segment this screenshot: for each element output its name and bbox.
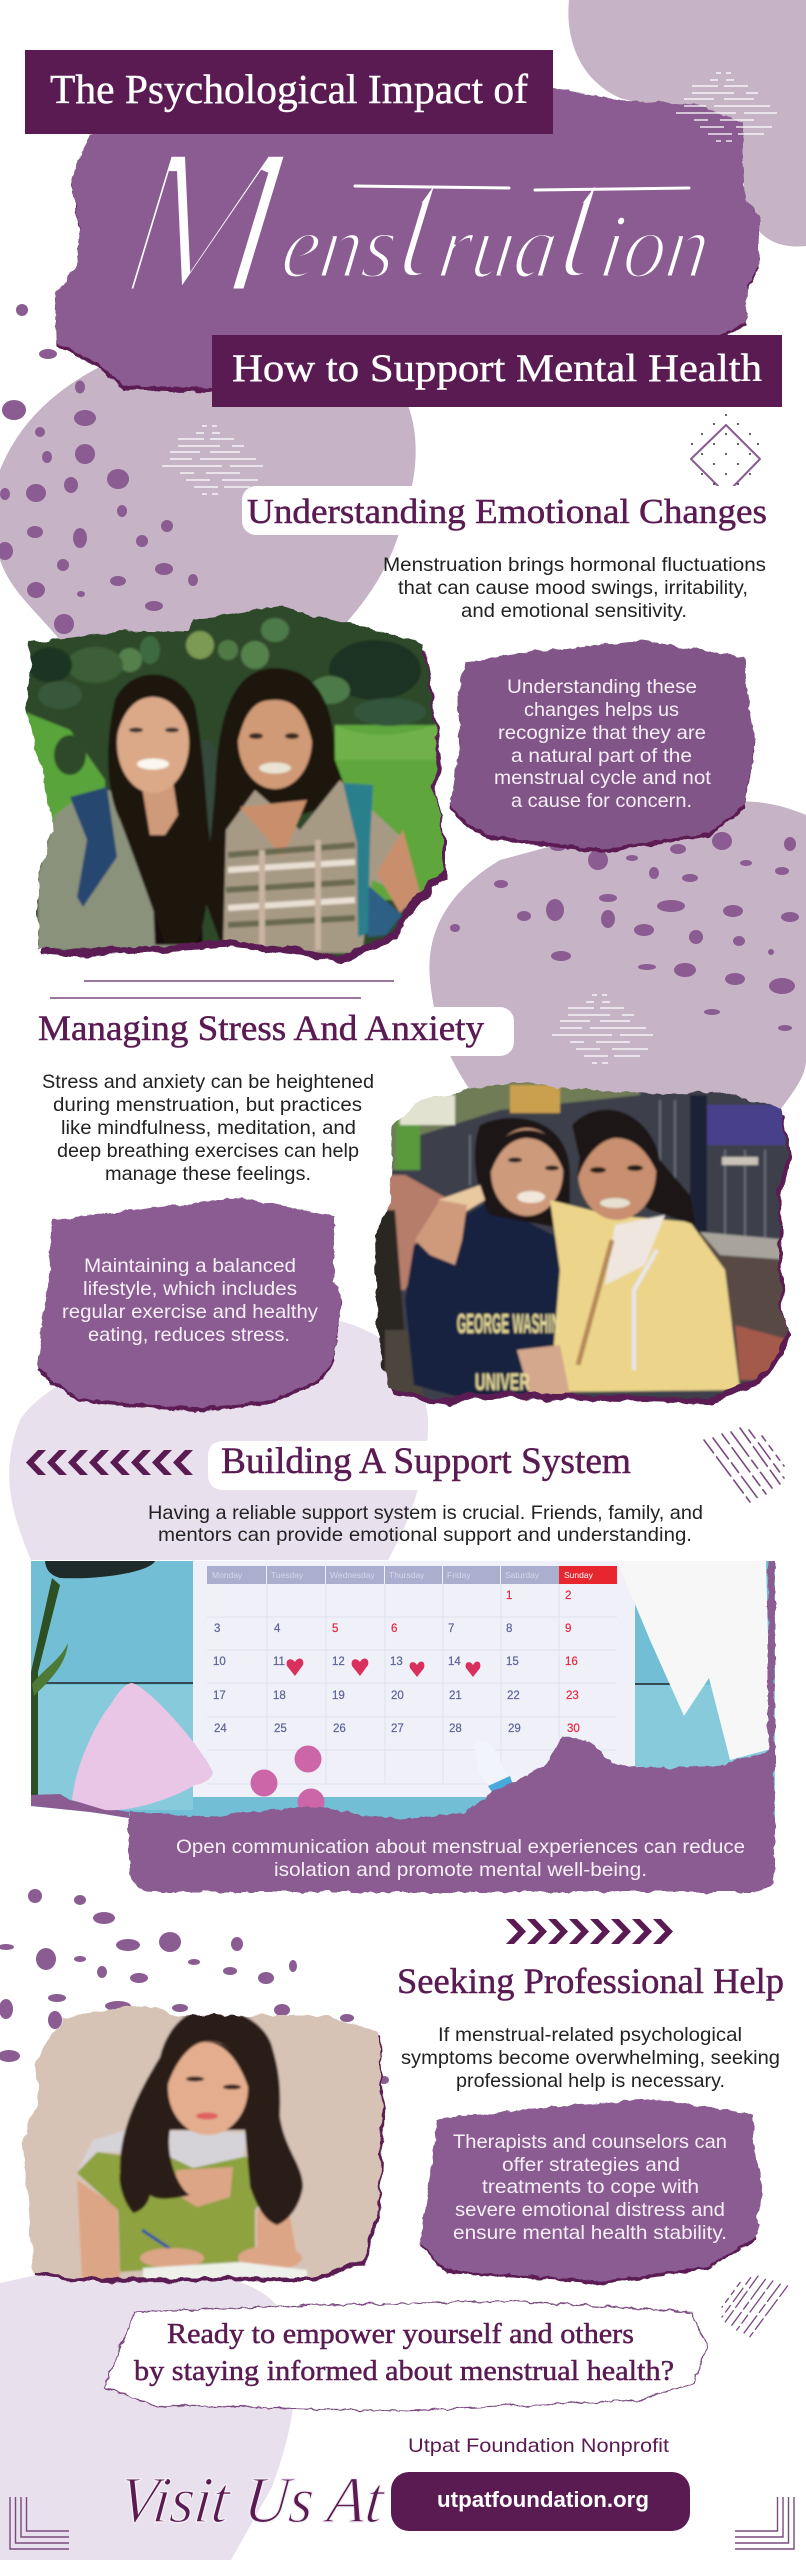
speckles: left [0, 304, 198, 634]
calendar sheet: 3 [214, 1623, 220, 1635]
callout: understanding changes: changes helps us [524, 699, 679, 721]
calendar sheet: 27 [391, 1723, 404, 1735]
callout: balanced lifestyle: regular exercise and healthy [62, 1301, 318, 1323]
call to action [105, 2301, 707, 2411]
panel: open communication: Open communication about menstrual experiences can reduce [176, 1836, 745, 1858]
photo: girl writing [15, 2000, 390, 2285]
calendar sheet: 29 [508, 1723, 521, 1735]
calendar sheet: Sunday [564, 1570, 594, 1580]
callout: understanding changes: a cause for concern. [511, 790, 692, 812]
subtitle box [212, 335, 782, 407]
text: professional help intro: If menstrual-related psychological [438, 2024, 742, 2046]
background blob: right [429, 801, 806, 1110]
calendar sheet: 28 [449, 1723, 462, 1735]
callout: balanced lifestyle [37, 1198, 342, 1412]
hoodie lettering lower: UNIVER [475, 1369, 530, 1396]
calendar sheet: 8 [506, 1623, 512, 1635]
calendar sheet: 25 [274, 1723, 287, 1735]
purple torn sliver [31, 1794, 129, 1819]
photo: calendar and period products [31, 1561, 775, 1831]
friend right [550, 1200, 740, 1392]
title line 1: The Psychological Impact of [50, 66, 528, 112]
text: stress intro [42, 1071, 374, 1185]
calendar sheet: 9 [565, 1623, 571, 1635]
panel: open communication: isolation and promote mental well-being. [274, 1859, 647, 1881]
calendar sheet: 5 [332, 1623, 338, 1635]
title banner [25, 50, 782, 407]
visit us script: Visit Us At [116, 2464, 389, 2537]
calendar sheet: 22 [507, 1690, 520, 1702]
text: professional help intro: symptoms become overwhelming, seeking [401, 2047, 780, 2069]
background blob: top right [568, 0, 806, 247]
website button [391, 2472, 690, 2531]
text: stress intro: Stress and anxiety can be heightened [42, 1071, 374, 1093]
pills [250, 1746, 324, 1808]
title script word: M [102, 101, 313, 340]
calendar sheet: Friday [447, 1570, 471, 1580]
calendar sheet: 20 [391, 1690, 404, 1702]
calendar sheet: 14 [448, 1656, 461, 1668]
calendar sheet: 18 [273, 1690, 286, 1702]
white dash pattern: top right [676, 73, 777, 141]
title box top [25, 50, 553, 134]
calendar sheet: 2 [565, 1590, 571, 1602]
heading: Building A Support System [208, 1441, 806, 1490]
callout: balanced lifestyle: Maintaining a balanced [84, 1255, 296, 1277]
corner lines left [10, 2497, 69, 2549]
calendar sheet: Wednesday [330, 1570, 375, 1580]
heading: Building A Support System: Building A Support System [221, 1441, 631, 1482]
white dash pattern: left [162, 426, 263, 494]
callout: understanding changes [450, 641, 755, 853]
text: emotional changes intro [383, 554, 766, 622]
callout: therapists and counselors: severe emotional distress and [455, 2199, 725, 2221]
calendar sheet: 1 [506, 1590, 512, 1602]
arms and shirt [77, 2180, 120, 2280]
heading: Managing Stress And Anxiety [0, 1007, 514, 1056]
call to action: by staying informed about menstrual health? [134, 2355, 674, 2387]
torn purple shape [55, 88, 760, 392]
calendar sheet: Monday [212, 1570, 243, 1580]
calendar sheet: 6 [391, 1623, 397, 1635]
text: stress intro: manage these feelings. [105, 1163, 311, 1185]
callout: therapists and counselors: Therapists and counselors can [453, 2131, 727, 2153]
text: support system intro: mentors can provide emotional support and understanding. [158, 1524, 692, 1546]
title script word: ens [276, 195, 403, 297]
photo: two friends by a fence: GEORGE WASHIN [457, 1308, 560, 1339]
chevrons: left pointing [26, 1450, 193, 1475]
speckles: right [450, 832, 799, 1031]
calendar sheet: 15 [506, 1656, 519, 1668]
friend left [404, 1204, 560, 1396]
callout: therapists and counselors [420, 2099, 761, 2284]
diagonal stripes icon [704, 1428, 784, 1502]
background blob: bottom pale [0, 2272, 295, 2560]
text: stress intro: deep breathing exercises can help [57, 1140, 359, 1162]
calendar sheet: 4 [274, 1623, 281, 1635]
heading: Seeking Professional Help: Seeking Professional Help [397, 1961, 784, 2001]
speckles: lower left [0, 1889, 389, 2084]
title script word: truation [387, 126, 726, 314]
friend left [38, 790, 203, 950]
friend right [205, 668, 350, 950]
heading: Understanding Emotional Changes [242, 486, 806, 535]
background blob: middle pale [9, 1315, 428, 1560]
callout: balanced lifestyle: lifestyle, which includes [83, 1278, 297, 1300]
calendar sheet: 23 [566, 1690, 579, 1702]
call to action: Ready to empower yourself and others [167, 2318, 634, 2350]
pad [635, 1561, 770, 1760]
photo: two friends outdoors [20, 600, 450, 970]
text: professional help intro: professional help is necessary. [456, 2070, 725, 2092]
text: emotional changes intro: Menstruation brings hormonal fluctuations [383, 554, 766, 576]
calendar sheet [193, 1561, 635, 1797]
calendar sheet: 16 [565, 1656, 578, 1668]
background blob: left [0, 362, 416, 640]
text: emotional changes intro: and emotional sensitivity. [461, 600, 687, 622]
calendar sheet: 12 [332, 1656, 345, 1668]
menstrual cup [72, 1683, 213, 1810]
callout: balanced lifestyle: eating, reduces stress. [88, 1324, 290, 1346]
callout: therapists and counselors: treatments to cope with [482, 2176, 699, 2198]
subtitle: How to Support Mental Health [232, 347, 762, 390]
tampon [475, 1750, 512, 1792]
white dash pattern: middle right [552, 995, 653, 1063]
callout: understanding changes: menstrual cycle and not [494, 767, 712, 789]
callout: understanding changes: Understanding these [507, 676, 697, 698]
hair [120, 2007, 303, 2225]
callout: understanding changes: a natural part of the [511, 745, 692, 767]
calendar sheet: 26 [333, 1723, 346, 1735]
calendar sheet: 19 [332, 1690, 345, 1702]
text: stress intro: during menstruation, but practices [53, 1094, 362, 1116]
heading: Understanding Emotional Changes: Understanding Emotional Changes [247, 492, 767, 531]
corner lines right [735, 2497, 794, 2549]
text: professional help intro [401, 2024, 780, 2092]
calendar sheet: 7 [448, 1623, 454, 1635]
diamond dotted icon [691, 414, 760, 494]
callout: understanding changes: recognize that they are [498, 722, 706, 744]
heading: Managing Stress And Anxiety: Managing Stress And Anxiety [38, 1008, 484, 1048]
text: support system intro [148, 1502, 703, 1546]
calendar sheet: 10 [213, 1656, 226, 1668]
panel: open communication [129, 1561, 775, 1892]
calendar sheet: Thursday [389, 1570, 425, 1580]
callout: therapists and counselors: offer strategies and [502, 2154, 680, 2176]
organisation name: Utpat Foundation Nonprofit [408, 2435, 670, 2457]
calendar sheet: 17 [213, 1690, 226, 1702]
calendar sheet: 11 [273, 1656, 285, 1668]
calendar sheet: Tuesday [271, 1570, 304, 1580]
calendar sheet: 13 [390, 1656, 403, 1668]
chevrons: right pointing [506, 1919, 673, 1944]
text: stress intro: like mindfulness, meditation, and [61, 1117, 356, 1139]
website button: utpatfoundation.org [437, 2487, 649, 2512]
calendar sheet: 21 [449, 1690, 462, 1702]
text: support system intro: Having a reliable support system is crucial. Friends, family, and [148, 1502, 703, 1524]
calendar sheet: 30 [567, 1723, 580, 1735]
calendar sheet: 24 [214, 1723, 227, 1735]
photo: two friends by a fence [370, 1075, 800, 1410]
callout: therapists and counselors: ensure mental health stability. [453, 2222, 727, 2244]
diagonal stripes icon lower [722, 2276, 788, 2337]
text: emotional changes intro: that can cause mood swings, irritability, [398, 577, 748, 599]
calendar sheet: Saturday [505, 1570, 540, 1580]
